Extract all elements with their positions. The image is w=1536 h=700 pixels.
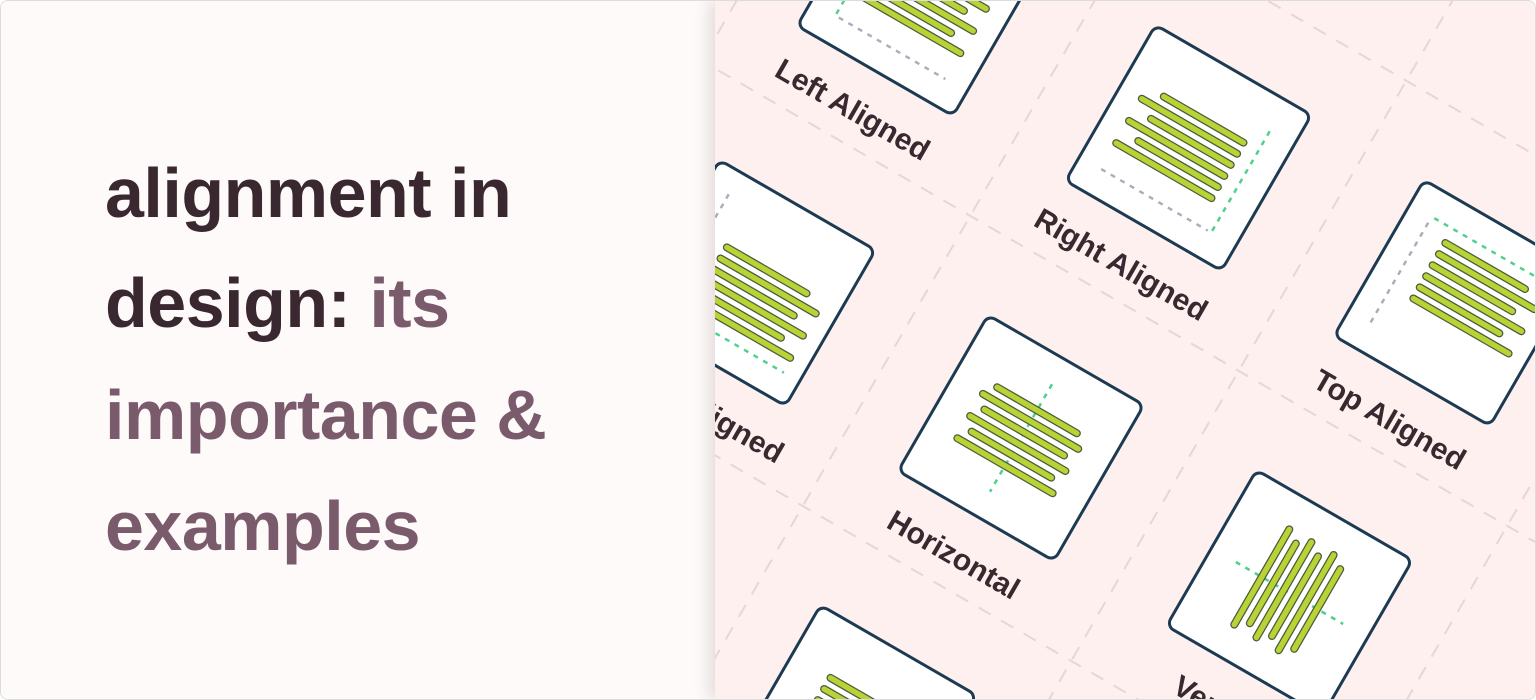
title line 4: examples: [105, 487, 420, 565]
card: Right Aligned: Right Aligned: [1029, 202, 1213, 328]
card: lower-left partial: [462, 450, 708, 696]
card: Top Aligned: [1303, 180, 1536, 480]
card: Horizontal: Horizontal: [881, 504, 1025, 606]
panel: title: [1, 1, 715, 699]
title line 1: alignment in: [105, 154, 511, 232]
card: Left Aligned: Left Aligned: [769, 53, 935, 168]
card: Horizontal: [867, 315, 1144, 615]
panel: alignment examples grid: [715, 1, 1536, 699]
card: Left Aligned: [766, 0, 1043, 170]
title line 2: design: its: [105, 264, 450, 342]
card: Bottom Aligned: [580, 150, 894, 470]
card: Vertical: [1136, 470, 1412, 700]
card: Top Aligned: Top Aligned: [1307, 363, 1471, 477]
card: Right Aligned: [1029, 21, 1317, 328]
card: bottom partial: [731, 605, 976, 700]
title line 3: importance &: [105, 376, 546, 454]
